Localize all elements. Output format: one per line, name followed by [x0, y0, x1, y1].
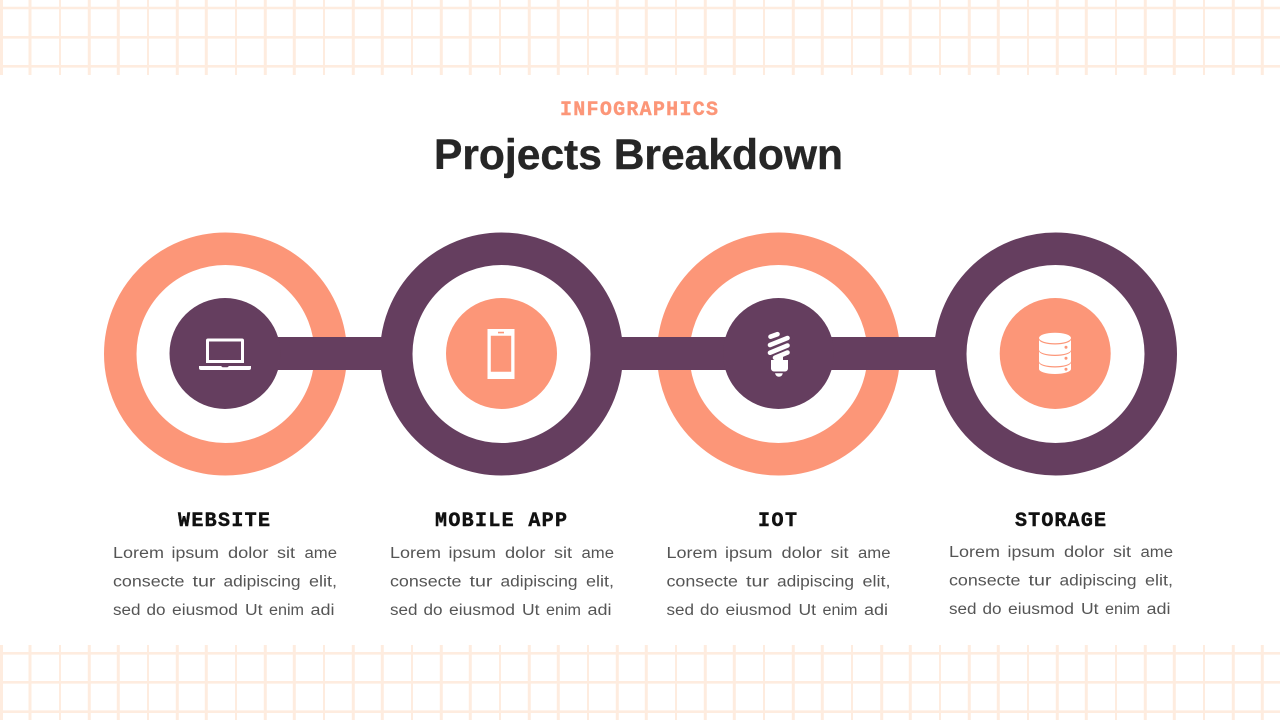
hub: iot	[723, 298, 834, 409]
ring: storage	[950, 249, 1161, 459]
body: iot: enim	[822, 602, 858, 619]
body: website: ame	[304, 545, 337, 562]
hub: storage	[1000, 298, 1111, 409]
body: iot: eiusmod	[726, 602, 792, 619]
eyebrow label: INFOGRAPHICS	[560, 99, 718, 122]
body: website: ipsum	[172, 545, 219, 562]
body: website: adi	[310, 602, 334, 619]
body: storage: enim	[1105, 601, 1140, 618]
body: website: Lorem	[113, 545, 164, 562]
body: iot: do	[700, 602, 719, 619]
body: mobile app: Ut	[522, 602, 540, 619]
icon: laptop	[199, 338, 251, 370]
body: website: adipiscing	[224, 574, 300, 590]
ring: iot	[673, 249, 884, 459]
hub: website	[170, 298, 280, 409]
heading: mobile app: MOBILE APP	[435, 510, 567, 533]
body: website: dolor	[228, 545, 268, 562]
body: mobile app: sit	[554, 545, 573, 562]
text block: mobile app	[390, 510, 618, 619]
body: mobile app: ame	[582, 545, 614, 562]
body: iot: consecte	[666, 574, 738, 590]
body: iot: Ut	[798, 602, 817, 619]
body: storage: sed	[949, 601, 976, 618]
body: iot: ame	[858, 545, 890, 562]
text block: website	[113, 510, 341, 619]
body: iot: elit,	[862, 574, 890, 590]
body: website: Ut	[245, 602, 263, 619]
body: mobile app: tur	[470, 574, 492, 590]
body: mobile app: sed	[390, 602, 418, 619]
body: storage: tur	[1028, 572, 1052, 590]
body: website: enim	[269, 602, 304, 619]
body: iot: adipiscing	[777, 574, 854, 590]
body: iot: adi	[864, 602, 888, 619]
body: storage: Lorem	[949, 544, 1000, 561]
body: mobile app: eiusmod	[449, 602, 515, 619]
icon: light bulb	[770, 334, 788, 377]
body: website: do	[146, 602, 166, 619]
body: website: sed	[113, 602, 140, 619]
ring: mobile app	[396, 249, 607, 459]
body: website: elit,	[309, 574, 337, 590]
icon: smartphone	[488, 329, 514, 379]
heading: iot: IOT	[758, 510, 797, 533]
body: mobile app: elit,	[586, 574, 614, 590]
ring: website	[120, 249, 331, 459]
body: mobile app: enim	[546, 602, 581, 619]
body: website: eiusmod	[172, 602, 238, 619]
body: iot: dolor	[782, 545, 822, 562]
body: mobile app: Lorem	[390, 545, 441, 562]
heading: storage: STORAGE	[1015, 510, 1106, 533]
background grid: top band	[0, 0, 1280, 75]
body: storage: dolor	[1064, 544, 1104, 561]
body: mobile app: dolor	[505, 545, 546, 562]
body: storage: consecte	[949, 572, 1020, 590]
body: iot: sed	[666, 602, 694, 619]
body: iot: Lorem	[666, 545, 718, 562]
body: iot: ipsum	[725, 545, 772, 562]
hub: mobile app	[446, 298, 557, 409]
body: website: consecte	[113, 574, 184, 590]
body: storage: Ut	[1081, 601, 1099, 618]
icon: database	[1039, 333, 1071, 374]
connector bars	[270, 337, 946, 370]
body: iot: tur	[746, 574, 769, 590]
body: storage: eiusmod	[1008, 601, 1074, 618]
heading: website: WEBSITE	[178, 510, 270, 533]
body: mobile app: do	[424, 602, 442, 619]
body: iot: sit	[830, 545, 849, 562]
body: mobile app: adi	[588, 602, 612, 619]
body: mobile app: consecte	[390, 574, 462, 590]
background grid: bottom band	[0, 645, 1280, 720]
body: mobile app: ipsum	[448, 545, 496, 562]
title: Projects Breakdown	[434, 131, 843, 179]
body: storage: ame	[1140, 544, 1173, 561]
text block: storage	[949, 510, 1177, 618]
body: mobile app: adipiscing	[500, 574, 578, 590]
body: website: sit	[277, 545, 296, 562]
body: storage: do	[982, 601, 1002, 618]
body: storage: elit,	[1145, 572, 1173, 590]
body: storage: sit	[1113, 544, 1132, 561]
body: storage: adipiscing	[1060, 572, 1136, 590]
body: website: tur	[192, 574, 216, 590]
text block: iot	[666, 510, 895, 619]
body: storage: ipsum	[1008, 544, 1055, 561]
body: storage: adi	[1146, 601, 1170, 618]
